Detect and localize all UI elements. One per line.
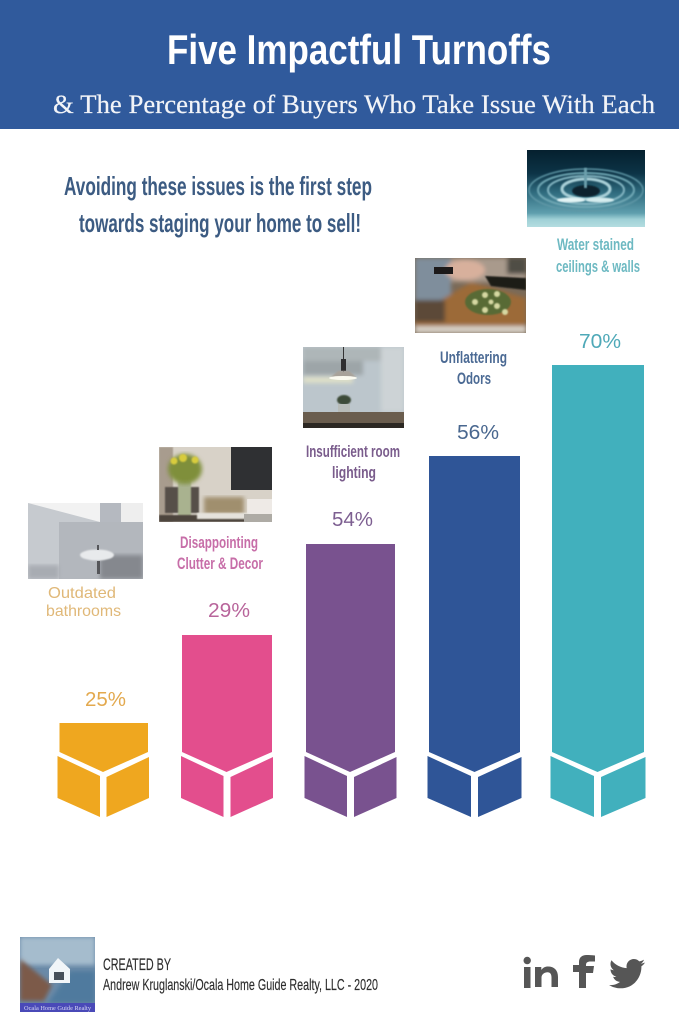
title: Five Impactful Turnoffs	[167, 26, 551, 73]
value: 70%	[579, 331, 621, 353]
credit text	[103, 955, 378, 994]
credit text: Andrew Kruglanski/Ocala Home Guide Realty, LLC - 2020	[103, 977, 378, 994]
icon: twitter	[609, 959, 645, 988]
bar	[428, 456, 522, 817]
label: lighting	[332, 464, 376, 482]
photo: chopping food	[415, 258, 526, 333]
label: Odors	[457, 369, 491, 388]
label	[556, 235, 640, 276]
credit text: CREATED BY	[103, 955, 171, 974]
value: 54%	[332, 509, 373, 531]
column: insufficient room lighting	[303, 347, 404, 817]
label	[440, 348, 507, 388]
header banner	[0, 0, 679, 129]
value: 29%	[208, 600, 250, 622]
bar	[304, 544, 396, 817]
subtitle: & The Percentage of Buyers Who Take Issue With Each	[53, 90, 655, 119]
logo	[20, 937, 95, 1012]
label	[46, 585, 121, 620]
photo: pendant lamp	[303, 347, 404, 428]
intro text: towards staging your home to sell!	[79, 208, 361, 238]
photo: flowers and decor	[159, 447, 272, 522]
photo: bathroom sink	[28, 503, 143, 579]
label	[177, 533, 263, 573]
footer credit	[20, 937, 378, 1012]
label: Disappointing	[180, 533, 258, 552]
label: ceilings & walls	[556, 257, 640, 276]
intro text: Avoiding these issues is the first step	[64, 171, 372, 201]
label	[306, 443, 400, 482]
column: disappointing clutter and decor	[159, 447, 273, 817]
label: Water stained	[557, 235, 634, 254]
photo: water drop	[527, 150, 645, 227]
value: 25%	[85, 689, 126, 711]
intro text	[64, 171, 372, 238]
social icons	[524, 955, 645, 988]
bar	[550, 365, 646, 817]
bar	[58, 723, 149, 817]
bar	[181, 635, 273, 817]
label: bathrooms	[46, 603, 121, 620]
column: water stained ceilings and walls	[527, 150, 646, 817]
label: Outdated	[48, 585, 116, 602]
column: outdated bathrooms	[28, 503, 149, 817]
logo: Ocala Home Guide Realty	[24, 1005, 92, 1012]
label: Unflattering	[440, 348, 507, 367]
column: unflattering odors	[415, 258, 526, 817]
icon: facebook	[573, 955, 595, 988]
icon: linkedin	[524, 957, 558, 988]
label: Clutter & Decor	[177, 554, 263, 573]
label: Insufficient room	[306, 443, 400, 461]
value: 56%	[457, 422, 499, 444]
